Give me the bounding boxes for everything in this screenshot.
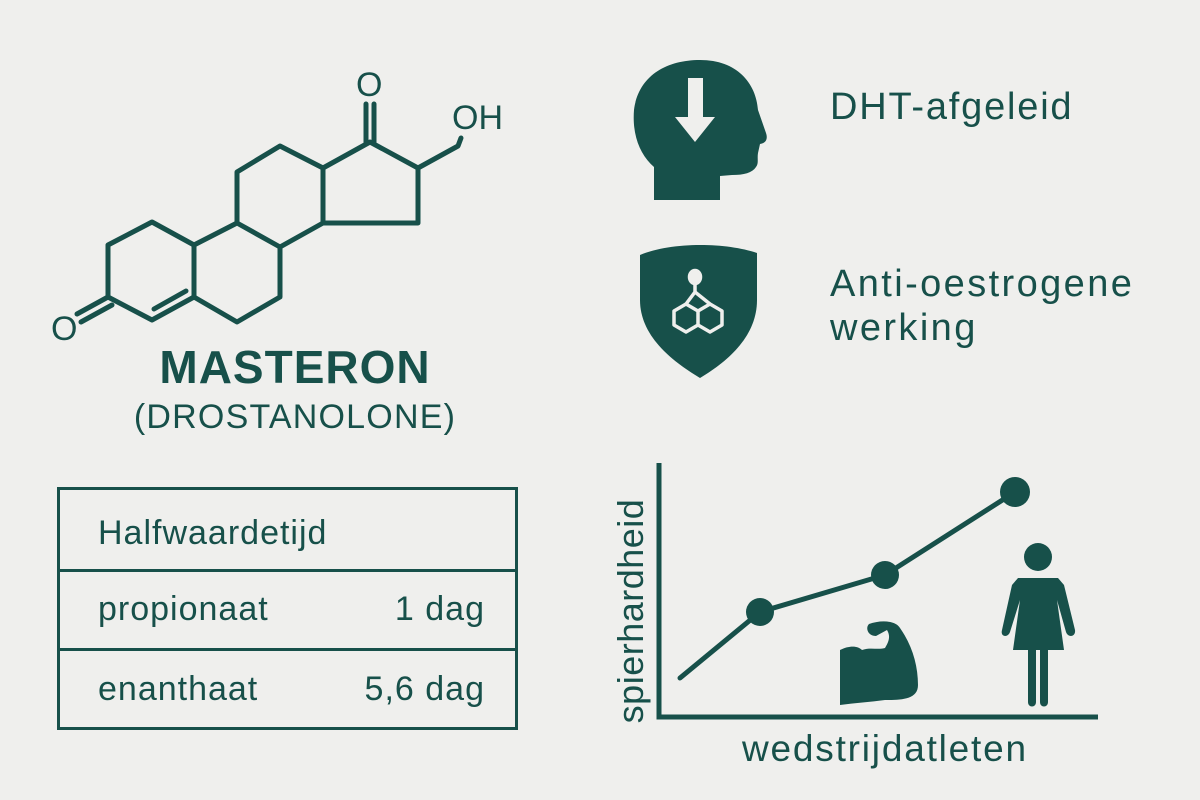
- label: Anti-oestrogene werking: Anti-oestrogene: [830, 263, 1134, 305]
- molecule: drostanolone structure: [51, 66, 503, 348]
- subtitle: (DROSTANOLONE): [134, 398, 456, 436]
- ketone bond: [366, 104, 374, 142]
- row: propionaat: 1 dag: [395, 590, 485, 628]
- row: enanthaat: enanthaat: [98, 670, 258, 708]
- icon: shield with molecule: [640, 245, 757, 378]
- atom label O top: O: [356, 66, 382, 104]
- OH bond: [418, 138, 461, 168]
- row: propionaat: [98, 590, 485, 628]
- atom label O left: O: [51, 310, 77, 348]
- label: Anti-oestrogene werking: [830, 263, 1134, 349]
- x-axis label: wedstrijdatleten: wedstrijdatleten: [742, 728, 1028, 769]
- data line: [680, 477, 1030, 678]
- row: enanthaat: [98, 670, 485, 708]
- title: MASTERON: [159, 341, 431, 393]
- ring B: [194, 223, 280, 322]
- row: propionaat: propionaat: [98, 590, 269, 628]
- chart: spierhardheid vs wedstrijdatleten: [656, 463, 1098, 720]
- table header: Halfwaardetijd: [98, 514, 327, 552]
- ring D: [323, 142, 418, 223]
- table: half-life: [57, 487, 518, 730]
- ring A: [108, 222, 194, 320]
- icon: head with down arrow: [634, 60, 767, 200]
- 3-keto bond: [77, 297, 112, 322]
- row: enanthaat: 5,6 dag: [365, 670, 485, 708]
- icon: woman: [1002, 543, 1075, 706]
- ring C: [237, 146, 323, 247]
- icon: flexed arm: [840, 621, 918, 705]
- atom label OH: OH: [452, 99, 503, 137]
- axes: [659, 463, 1098, 717]
- label: Anti-oestrogene werking: werking: [830, 307, 978, 349]
- y-axis label: spierhardheid: spierhardheid: [610, 499, 651, 723]
- label: DHT-afgeleid: DHT-afgeleid: [830, 86, 1073, 128]
